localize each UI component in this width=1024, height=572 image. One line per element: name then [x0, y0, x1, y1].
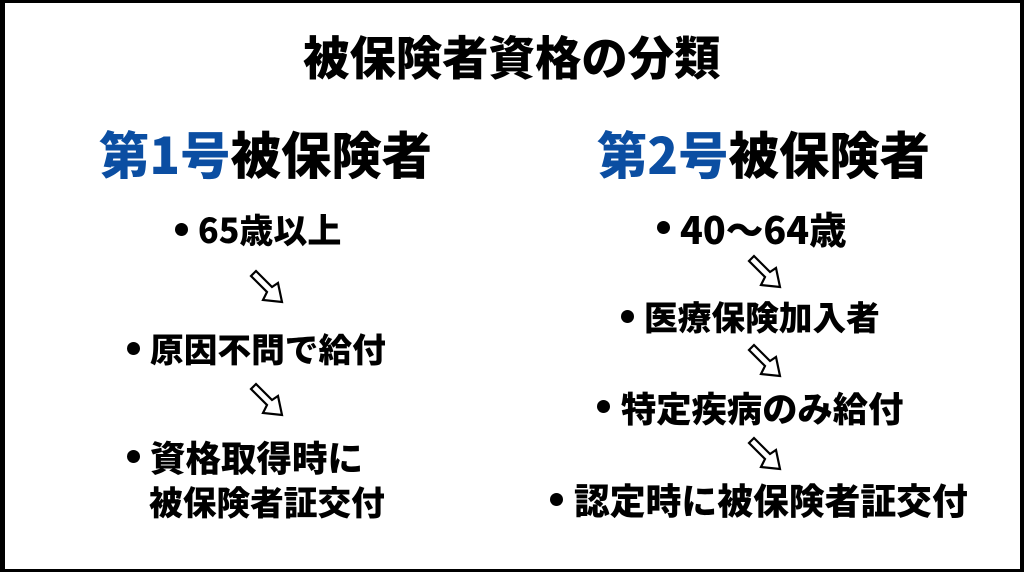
- heading: first insured: 第1号被保険者: [99, 116, 432, 189]
- item: specific diseases: 特定疾病のみ給付: [621, 382, 903, 433]
- item: medical insurance: 医療保険加入者: [644, 291, 880, 340]
- item: age 65: 65歳以上: [198, 204, 341, 253]
- item: age 40-64: 40～64歳: [680, 200, 847, 255]
- item: certificate: [127, 431, 385, 525]
- arrow: first 2: [251, 384, 282, 415]
- panel: second insured: [550, 116, 968, 525]
- item: certificate: 被保険者証交付: [149, 476, 385, 525]
- arrow: second 2: [749, 345, 780, 376]
- item: certificate on approval: 認定時に被保険者証交付: [574, 473, 968, 525]
- arrow: second 1: [749, 256, 780, 287]
- arrow: first 1: [251, 271, 282, 302]
- arrow: second 3: [749, 438, 780, 469]
- panel: first insured: [99, 116, 432, 525]
- item: any cause: 原因不問で給付: [150, 323, 386, 372]
- title: 被保険者資格の分類: [303, 22, 721, 89]
- heading: second insured: 第2号被保険者: [597, 116, 930, 189]
- item: certificate: 資格取得時に: [150, 431, 363, 482]
